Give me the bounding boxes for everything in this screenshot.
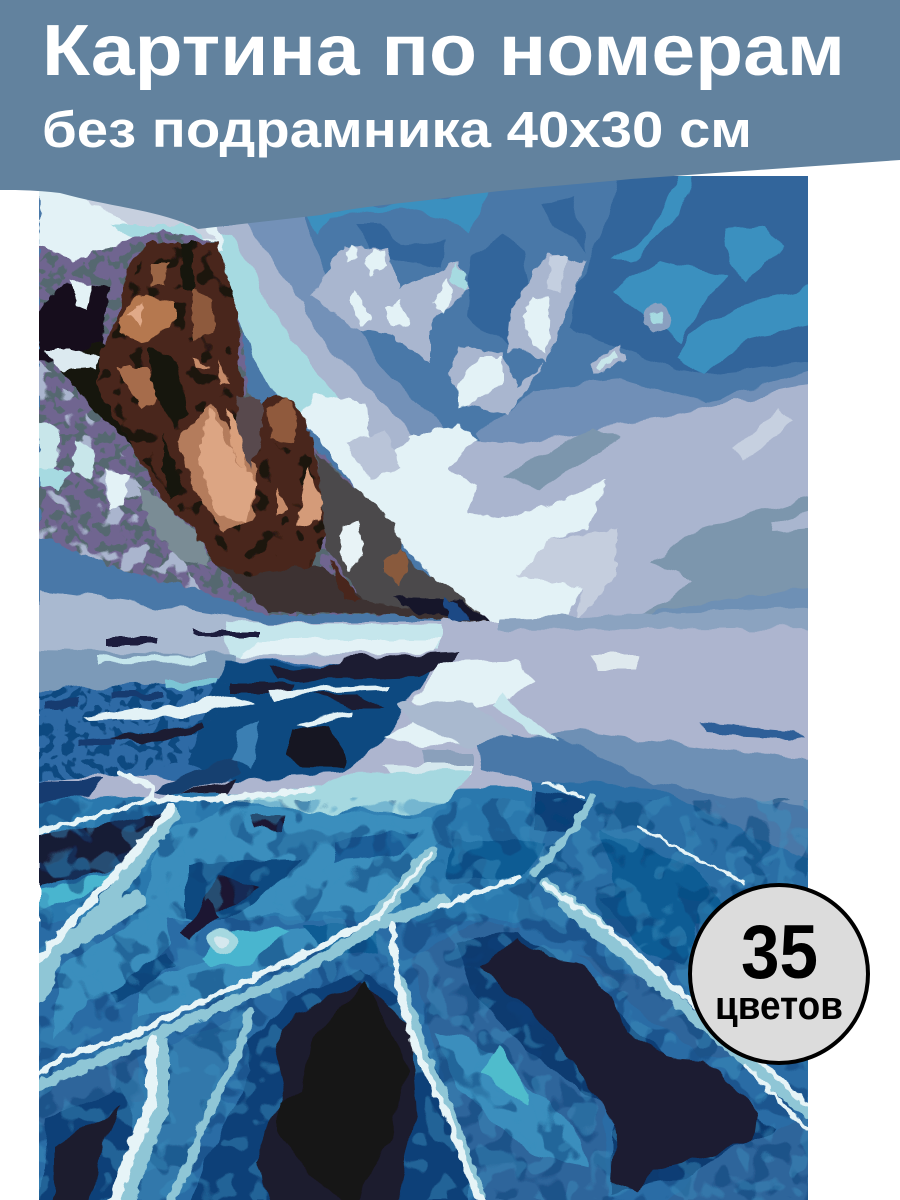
- left dark water: [39, 650, 431, 780]
- subtitle: без подрамника 40x30 см: [42, 101, 752, 158]
- purple slope: [39, 230, 493, 623]
- badge: 35 colours: цветов: [715, 984, 843, 1028]
- badge: 35 colours: [690, 885, 868, 1063]
- badge: 35 colours: 35: [741, 910, 818, 995]
- title: Картина по номерам: [42, 11, 845, 91]
- painting: frozen lake and cliff: [20, 160, 820, 1200]
- cliff: [39, 230, 493, 623]
- mottled paint texture: [39, 800, 808, 1200]
- bright clouds: [39, 176, 671, 628]
- bright centre reflection: [411, 660, 534, 707]
- sky: [20, 160, 820, 640]
- ice cracks: [39, 773, 808, 1200]
- far lake and left shore: [30, 590, 820, 925]
- right ice gradient: [524, 728, 808, 810]
- header band: [0, 0, 900, 229]
- ice field: [30, 770, 820, 1200]
- lower ice: [30, 920, 820, 1200]
- brown rock body: [97, 243, 327, 593]
